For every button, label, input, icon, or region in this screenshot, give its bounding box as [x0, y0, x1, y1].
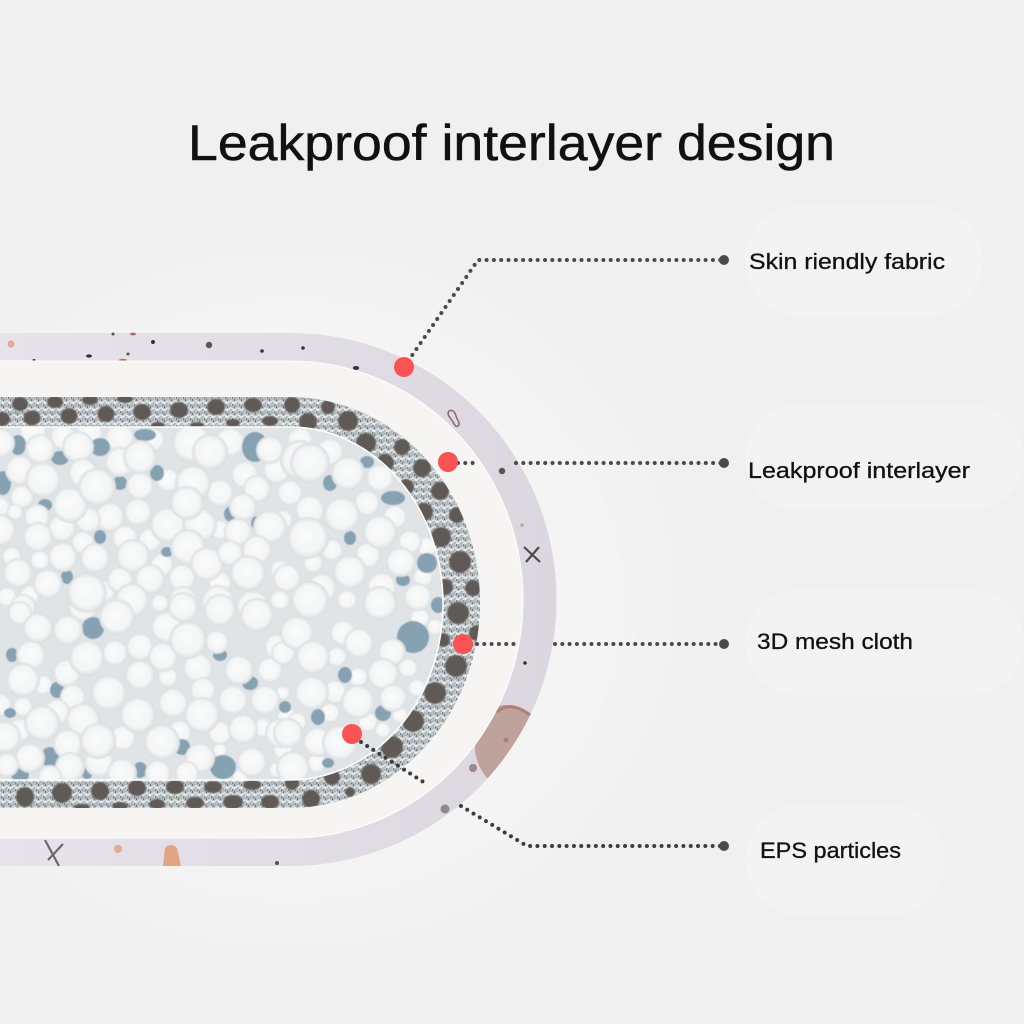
callout: 3D mesh cloth: 3D mesh cloth	[757, 629, 913, 654]
callout: EPS particles	[342, 724, 901, 863]
3D mesh cloth layer	[0, 395, 485, 810]
blue backing visible between particles	[0, 429, 445, 782]
cross-section diagram	[0, 332, 556, 866]
callout: skin friendly fabric	[394, 249, 945, 377]
EPS particles	[0, 418, 460, 790]
title: Leakproof interlayer design	[188, 115, 835, 171]
infographic canvas	[0, 123, 970, 866]
callout: leakproof interlayer	[438, 452, 971, 483]
callout: leakproof interlayer: Leakproof interlayer	[748, 458, 971, 483]
white edge of particle window	[0, 427, 443, 780]
callout: skin friendly fabric: Skin riendly fabric	[749, 249, 945, 274]
outer skin friendly fabric layer	[0, 332, 556, 866]
fabric print: bear	[163, 705, 535, 866]
fabric print: dots and marks	[8, 332, 540, 866]
leakproof interlayer	[0, 361, 523, 838]
callout: EPS particles: EPS particles	[760, 838, 901, 863]
callout: 3D mesh cloth	[453, 629, 913, 654]
